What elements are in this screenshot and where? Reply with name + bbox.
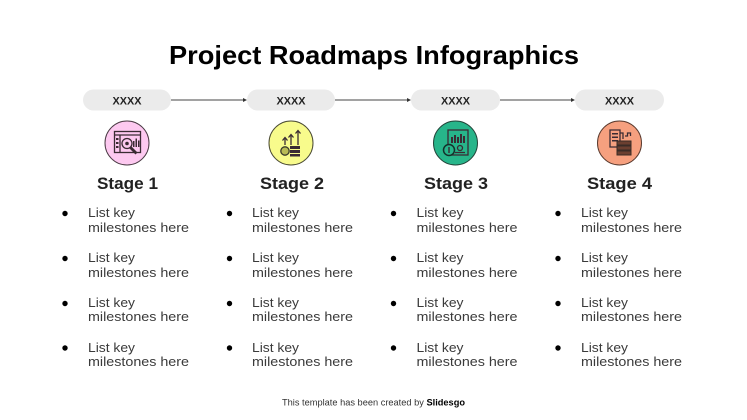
milestone list: stage 3: milestones here bbox=[416, 309, 518, 324]
milestone list: stage 4: milestones here bbox=[581, 309, 682, 324]
milestone list: stage 1 bbox=[62, 205, 189, 369]
pill: stage 1 bbox=[83, 90, 171, 110]
pill: stage 3: XXXX bbox=[441, 96, 471, 108]
milestone list: stage 3: List key bbox=[416, 250, 464, 265]
milestone list: stage 3: milestones here bbox=[416, 265, 518, 280]
pill: stage 1: XXXX bbox=[112, 96, 142, 108]
milestone list: stage 4: milestones here bbox=[581, 220, 682, 235]
milestone list: stage 4: List key bbox=[581, 205, 629, 220]
milestone list: stage 2: milestones here bbox=[252, 265, 353, 280]
pill: stage 4 bbox=[575, 90, 664, 110]
milestone list: stage 3 bbox=[391, 205, 518, 369]
icon: website analysis bbox=[105, 121, 149, 165]
milestone list: stage 4: milestones here bbox=[581, 354, 682, 369]
milestone list: stage 3: List key bbox=[416, 340, 464, 355]
icon: rising coins bbox=[269, 121, 313, 165]
heading: stage 4: Stage 4 bbox=[587, 174, 653, 193]
arrow: stage 2 to 3 bbox=[335, 98, 411, 102]
heading: stage 1: Stage 1 bbox=[97, 174, 158, 193]
milestone list: stage 2: milestones here bbox=[252, 220, 353, 235]
milestone list: stage 3: milestones here bbox=[416, 354, 518, 369]
milestone list: stage 4: List key bbox=[581, 340, 629, 355]
milestone list: stage 2: List key bbox=[252, 340, 300, 355]
footer credit: This template has been created by Slidesgo bbox=[282, 398, 466, 408]
milestone list: stage 2: List key bbox=[252, 250, 300, 265]
arrow: stage 1 to 2 bbox=[171, 98, 247, 102]
milestone list: stage 1: List key bbox=[88, 205, 136, 220]
icon: documents and database bbox=[598, 121, 642, 165]
milestone list: stage 4: milestones here bbox=[581, 265, 682, 280]
arrow: stage 3 to 4 bbox=[500, 98, 575, 102]
milestone list: stage 1: List key bbox=[88, 250, 136, 265]
milestone list: stage 2: milestones here bbox=[252, 309, 353, 324]
milestone list: stage 1: milestones here bbox=[88, 220, 189, 235]
milestone list: stage 4: List key bbox=[581, 250, 629, 265]
title: Project Roadmaps Infographics bbox=[169, 40, 579, 70]
milestone list: stage 3: List key bbox=[416, 295, 464, 310]
milestone list: stage 1: List key bbox=[88, 340, 136, 355]
pill: stage 3 bbox=[411, 90, 500, 110]
icon: finance report bbox=[434, 121, 478, 165]
milestone list: stage 2: milestones here bbox=[252, 354, 353, 369]
milestone list: stage 1: milestones here bbox=[88, 354, 189, 369]
milestone list: stage 1: List key bbox=[88, 295, 136, 310]
milestone list: stage 3: milestones here bbox=[416, 220, 518, 235]
milestone list: stage 2: List key bbox=[252, 295, 300, 310]
pill: stage 4: XXXX bbox=[605, 96, 635, 108]
milestone list: stage 1: milestones here bbox=[88, 309, 189, 324]
milestone list: stage 2 bbox=[227, 205, 353, 369]
milestone list: stage 2: List key bbox=[252, 205, 300, 220]
milestone list: stage 4: List key bbox=[581, 295, 629, 310]
heading: stage 3: Stage 3 bbox=[424, 174, 488, 193]
pill: stage 2 bbox=[247, 90, 335, 110]
milestone list: stage 1: milestones here bbox=[88, 265, 189, 280]
heading: stage 2: Stage 2 bbox=[260, 174, 324, 193]
milestone list: stage 4 bbox=[555, 205, 682, 369]
milestone list: stage 3: List key bbox=[416, 205, 464, 220]
pill: stage 2: XXXX bbox=[276, 96, 306, 108]
timeline bbox=[83, 90, 664, 110]
